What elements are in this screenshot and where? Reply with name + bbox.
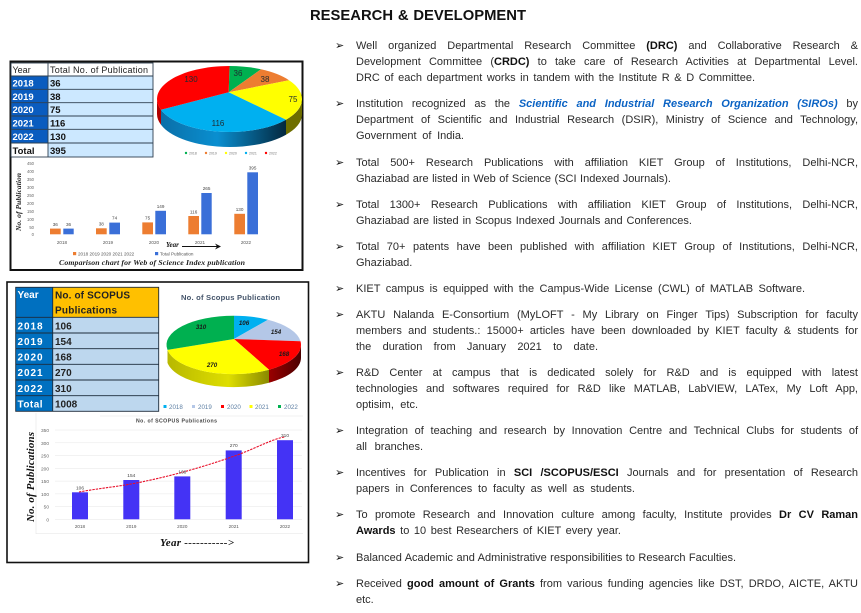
bullet: teaching and research integration: all branches. [356,441,423,453]
table: Web of Science publications by year: Total [12,146,34,157]
bullet: teaching and research integration: ➢ [335,424,344,437]
bullet: AKTU Nalanda E-Consortium: the duration from January 2021 to date. [356,341,598,353]
chart: SCOPUS 3D pie: 168 [279,351,290,358]
table: SCOPUS publications by year: 270 [55,368,72,379]
chart: SCOPUS bar chart with trend line: 2022 [280,524,291,529]
bullet: patents: Ghaziabad. [356,257,412,269]
panel: Web of Science publications [10,62,302,270]
table: SCOPUS publications by year: 1008 [55,400,78,410]
bullet: R&D Center [335,366,858,411]
bullet: research committees: Development Committee (CRDC) to take care of Research Activities at Departmental Level. [356,56,858,68]
bullet: Dr CV Raman Awards [335,508,858,537]
table: Web of Science publications by year: 2018 [12,78,34,90]
bullet: grants: etc. [356,594,374,606]
chart: Web of Science comparison bars: 2020 [149,240,160,245]
left column: charts and tables [6,60,310,564]
chart: Web of Science comparison bars: 38 [99,222,104,226]
chart: SCOPUS bar chart with trend line: 2020 [177,524,188,529]
pie legend: 2019 [198,404,212,411]
pie legend [185,152,277,156]
chart: Web of Science 3D pie: 38 [261,75,270,84]
chart: Web of Science comparison bars: 350 [27,177,35,182]
chart: SCOPUS bar chart with trend line: 150 [41,479,49,485]
chart: SCOPUS bar chart with trend line: 2021 [229,524,239,529]
bullet: patents: ➢ [335,240,344,253]
chart: SCOPUS bar chart with trend line: 106 [76,486,84,492]
chart: Web of Science comparison bars: 2022 [241,240,252,245]
chart: Web of Science comparison bars: 100 [27,217,35,222]
bullet: research committees [335,39,858,84]
bullet: Web of Science publications: Total 500+ Research Publications with affiliation KIET Group of Institutions, Delhi-NCR, [356,157,858,169]
pie legend: 2022 [284,404,298,411]
bullet: AKTU Nalanda E-Consortium [335,308,858,353]
bullet: publication incentives: papers in Conferences to faculty as well as students. [356,483,635,495]
bullet: balanced responsibilities: Balanced Academic and Administrative responsibilities to Research Faculties. [356,552,736,564]
bullet: Scopus publications: Total 1300+ Research Publications with affiliation KIET Group of Institutions, Delhi-NCR, [356,199,858,211]
bullet: publication incentives [335,466,858,495]
bullet: MATLAB license: KIET campus is equipped with the Campus-Wide License (CWL) of MATLAB Software. [356,283,805,295]
table: Web of Science publications by year: 395 [50,146,67,157]
chart: Web of Science comparison bars: 150 [27,209,35,214]
bar chart legend [73,251,194,256]
chart title: No. of SCOPUS Publications [136,418,217,424]
chart: SCOPUS bar chart with trend line: 50 [44,505,49,511]
chart: Web of Science comparison bars: 36 [53,222,58,227]
bullet: Scopus publications: ➢ [335,198,344,211]
chart: SCOPUS 3D pie [164,316,301,411]
chart: SCOPUS bar chart with trend line: 310 [281,433,289,439]
table: SCOPUS publications by year: Total [18,400,43,410]
table: SCOPUS publications by year: No. of SCOPUS [55,290,130,302]
chart: Web of Science comparison bars: 74 [112,216,118,220]
chart: SCOPUS bar chart with trend line: 300 [41,441,49,447]
axis label: Year arrow: Year [166,241,179,249]
bullet: SIROs recognition: Government of India. [356,130,464,142]
chart: SCOPUS bar chart with trend line: 168 [178,470,187,476]
bullet: Web of Science publications: Ghaziabad are listed in Web of Science (SCI Indexed Journals). [356,173,671,185]
chart: Web of Science comparison bars: 75 [145,216,151,220]
chart title: Scopus pie: No. of Scopus Publication [181,293,280,302]
bullet: R&D Center: R&D Center at campus that is dedicated solely for R&D and is equipped with latest [356,367,858,379]
bullet: research committees: DRC of each department works in tandem with the Institute R & D Committee. [356,72,755,84]
chart: SCOPUS 3D pie: 106 [239,320,250,327]
pie legend: 2021 [249,152,257,156]
table: Web of Science publications by year: Year [12,65,31,75]
axis label: Year arrow: Year -----------> [160,537,234,549]
bullet: Dr CV Raman Awards: Awards to 10 best Researchers of KIET every year. [356,525,621,537]
bullet: publication incentives: Incentives for Publication in SCI /SCOPUS/ESCI Journals and for presentation of Research [356,467,858,479]
table: Web of Science publications by year: 2020 [12,105,34,116]
chart: Web of Science comparison bars: 36 [66,222,71,227]
chart: Web of Science 3D pie: 130 [184,75,198,84]
bullet: AKTU Nalanda E-Consortium: AKTU Nalanda E-Consortium (MyLOFT - My Library on Finger Tips) Subscription for faculty [356,309,858,321]
bullet: AKTU Nalanda E-Consortium: ➢ [335,308,344,321]
bullet: grants [335,577,858,606]
chart caption: Comparison chart for Web of Science Index publication [59,258,245,267]
pie legend [164,404,298,411]
table: Web of Science publications by year: 116 [50,118,65,130]
chart: Web of Science comparison bars: 450 [27,161,35,166]
table: Web of Science publications by year: 36 [50,78,61,90]
pie legend: 2020 [227,404,241,411]
table: SCOPUS publications by year: Year [18,290,39,301]
table: SCOPUS publications by year: 154 [55,337,72,348]
pie legend: 2019 [209,152,217,156]
bullet: research committees: Well organized Departmental Research Committee (DRC) and Collaborative Research & [356,40,858,52]
chart: SCOPUS bar chart with trend line: 0 [46,517,49,523]
bullet: AKTU Nalanda E-Consortium: members and students.: 15000+ articles have been downloaded by KIET faculty & students for [356,325,858,337]
chart: Web of Science comparison bars: 50 [29,225,35,230]
chart: Web of Science comparison bars: 250 [27,193,35,198]
table: SCOPUS publications by year: 2019 [18,337,43,348]
chart: Web of Science comparison bars: 400 [27,169,35,174]
chart: SCOPUS 3D pie: 310 [196,324,207,331]
chart: SCOPUS bar chart with trend line: 2018 [75,524,86,529]
bullet: Dr CV Raman Awards: ➢ [335,508,344,521]
bullet: publication incentives: ➢ [335,466,344,479]
bullet: Web of Science publications [335,156,858,185]
table: Web of Science publications by year: 2022 [12,132,34,143]
chart: Web of Science comparison bars: 2021 [195,240,206,245]
bullet: SIROs recognition: Department of Scientific and Industrial Research (DSIR), Ministry of Science and Technology, [356,114,858,126]
chart: SCOPUS bar chart with trend line: 100 [41,492,49,498]
table: SCOPUS publications by year: 168 [55,352,72,364]
bullet: grants: ➢ [335,577,344,590]
chart: Web of Science 3D pie: 116 [212,119,225,128]
table: Web of Science publications by year: 2021 [12,118,34,130]
bullet: R&D Center: ➢ [335,366,344,379]
bullet: grants: Received good amount of Grants from various funding agencies like DST, DRDO, AICTE, AKTU [356,578,858,590]
chart: Web of Science comparison bars: 116 [190,210,198,214]
bar chart legend: Total Publication [160,251,194,256]
bullet: Dr CV Raman Awards: To promote Research and Innovation culture among faculty, Institute provides Dr CV Raman [356,509,858,521]
chart: SCOPUS 3D pie: 270 [206,362,218,369]
pie legend: 2022 [269,152,277,156]
bullet: research committees: ➢ [335,39,344,52]
table: Web of Science publications by year: 2019 [12,92,34,103]
bullet: patents [335,240,858,269]
chart: SCOPUS bar chart with trend line: 154 [127,473,136,479]
table: SCOPUS publications by year: 106 [55,322,72,332]
chart: Web of Science comparison bars: 2019 [103,240,114,245]
pie legend: 2021 [255,404,269,411]
chart: SCOPUS bar chart with trend line: 270 [230,443,238,449]
table: Web of Science publications by year: 75 [50,105,61,116]
table: SCOPUS publications by year: 2018 [18,322,43,332]
bullet: Scopus publications: Ghaziabad are listed in Scopus Indexed Journals and Conferences. [356,215,692,227]
table: Web of Science publications by year: 38 [50,92,61,103]
title: RESEARCH & DEVELOPMENT [310,8,526,24]
chart: Web of Science comparison bars: 130 [236,207,244,212]
chart: SCOPUS bar chart with trend line: No. of Publications [25,432,37,523]
chart: Web of Science 3D pie [157,66,302,156]
bullet: teaching and research integration [335,424,858,453]
bullet: patents: Total 70+ patents have been published with affiliation KIET Group of Institutions, Delhi-NCR, [356,241,858,253]
chart: Web of Science comparison bars: 200 [27,201,35,206]
table: SCOPUS publications by year: Publications [55,306,117,316]
table: SCOPUS publications by year [16,287,159,411]
bullet: SIROs recognition [335,97,858,142]
chart: Web of Science comparison bars [14,161,258,267]
chart: Web of Science comparison bars: 149 [157,204,165,209]
chart: Web of Science comparison bars: 300 [27,185,35,190]
chart: Web of Science comparison bars: 395 [249,166,257,170]
bullet: SIROs recognition: ➢ [335,97,344,110]
chart: SCOPUS bar chart with trend line: 350 [41,428,49,434]
chart: Web of Science 3D pie: 36 [234,69,243,78]
table: SCOPUS publications by year: 310 [55,384,72,395]
chart: SCOPUS bar chart with trend line: 200 [41,466,49,472]
table: SCOPUS publications by year: 2021 [18,368,43,379]
bullet: teaching and research integration: Integration of teaching and research by Innovation Centre and Technical Clubs for students of [356,425,858,437]
bullet: Scopus publications [335,198,858,227]
table: Web of Science publications by year [11,63,153,157]
pie legend: 2018 [189,152,197,156]
bullet: MATLAB license: ➢ [335,282,344,295]
chart: Web of Science comparison bars: No. of Publication [14,173,23,232]
bar chart legend: 2018 2019 2020 2021 2022 [78,251,135,256]
panel: SCOPUS publications [7,282,308,562]
chart: Web of Science comparison bars: 2018 [57,240,68,245]
pie legend: 2018 [169,404,183,411]
table: Web of Science publications by year: 130 [50,132,66,143]
chart: SCOPUS bar chart with trend line: 2019 [126,524,137,529]
table: SCOPUS publications by year: 2022 [18,384,43,395]
table: SCOPUS publications by year: 2020 [18,352,43,364]
bullet: R&D Center: technologies and softwares required for R&D like MATLAB, LabVIEW, LATex, My Loft App, [356,383,858,395]
chart: Web of Science comparison bars: 265 [203,186,211,191]
chart: SCOPUS bar chart with trend line [25,413,303,549]
chart: SCOPUS bar chart with trend line: 250 [41,454,49,460]
table: Web of Science publications by year: Total No. of Publication [50,65,148,75]
chart: SCOPUS 3D pie: 154 [271,329,282,336]
axis label: Year arrow [166,241,221,250]
pie legend: 2020 [229,152,237,156]
bullet: Web of Science publications: ➢ [335,156,344,169]
bullet: balanced responsibilities: ➢ [335,551,344,564]
bullet: R&D Center: optisim, etc. [356,399,418,411]
chart: Web of Science 3D pie: 75 [289,95,298,104]
chart: Web of Science comparison bars: 0 [32,232,35,237]
bullet: SIROs recognition: Institution recognized as the Scientific and Industrial Research Organization (SIROs) by [356,98,858,110]
